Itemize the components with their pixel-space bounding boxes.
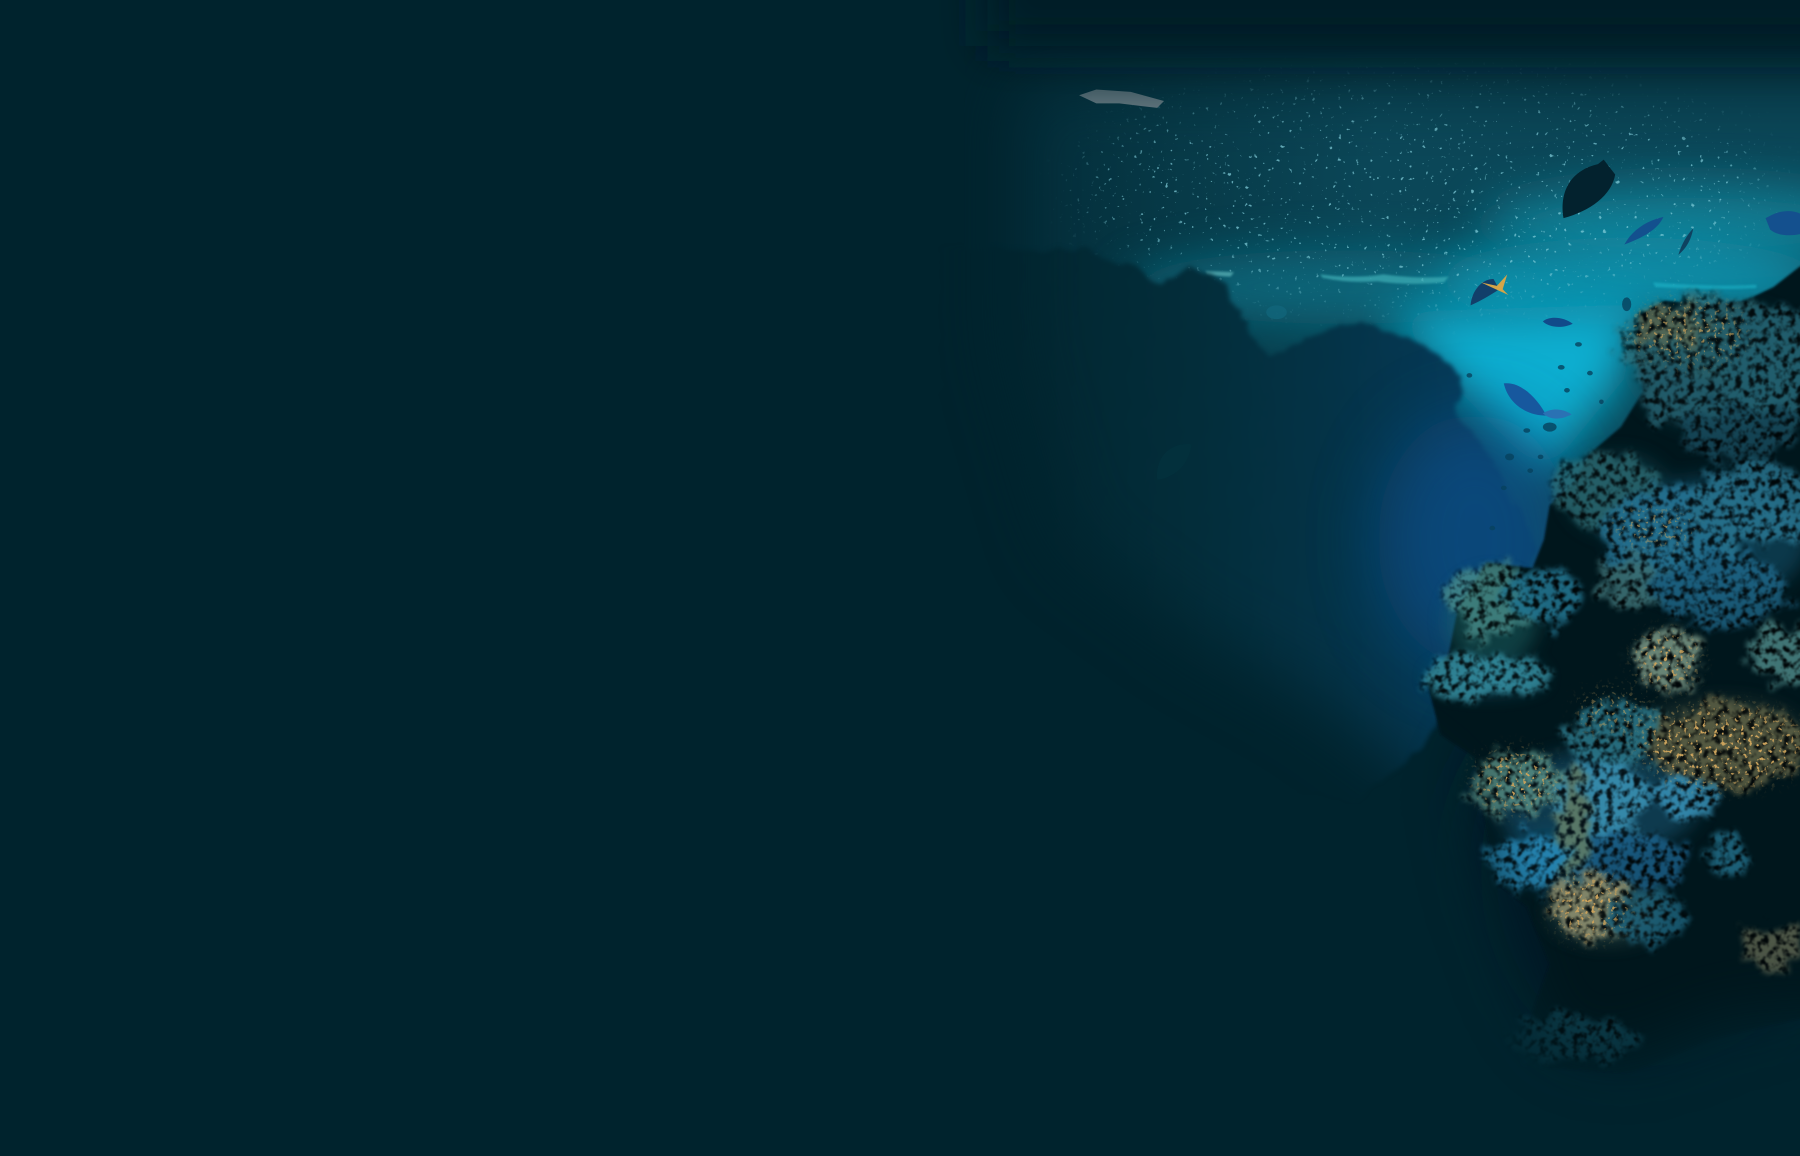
surface specks and bubbles <box>1060 68 1790 324</box>
panel: underwater reef scene <box>984 20 1800 1068</box>
surface glints <box>1079 90 1756 289</box>
staghorn and table coral <box>1420 560 1578 698</box>
fish: blue centre <box>1504 383 1546 416</box>
fish: small blue <box>1543 318 1573 327</box>
lower coral <box>1469 703 1800 1064</box>
gold coral speckles <box>1464 291 1800 950</box>
fish: large dark <box>1563 160 1615 218</box>
soft coral base glow <box>1429 304 1800 942</box>
fish: blue upper <box>1624 217 1663 245</box>
distant left reef silhouette <box>1041 248 1496 772</box>
coral clusters <box>1420 296 1800 1064</box>
fish: small school <box>1266 297 1631 530</box>
fish: right edge <box>1766 211 1800 235</box>
fish group <box>1157 160 1800 530</box>
fish: yellow <box>1471 274 1508 305</box>
right reef mass <box>1426 258 1800 1073</box>
masked photographic scene <box>1024 58 1800 1068</box>
fish: slim <box>1678 228 1693 255</box>
upper reef coral <box>1554 296 1800 525</box>
deep blue haze <box>1378 413 1573 666</box>
open water <box>1022 58 1800 568</box>
fish: tail <box>1543 409 1572 419</box>
lower right shadow <box>1480 816 1548 980</box>
middle blue coral <box>1599 461 1800 692</box>
fish: dark silhouette <box>1157 444 1192 480</box>
top fade <box>987 0 1800 46</box>
